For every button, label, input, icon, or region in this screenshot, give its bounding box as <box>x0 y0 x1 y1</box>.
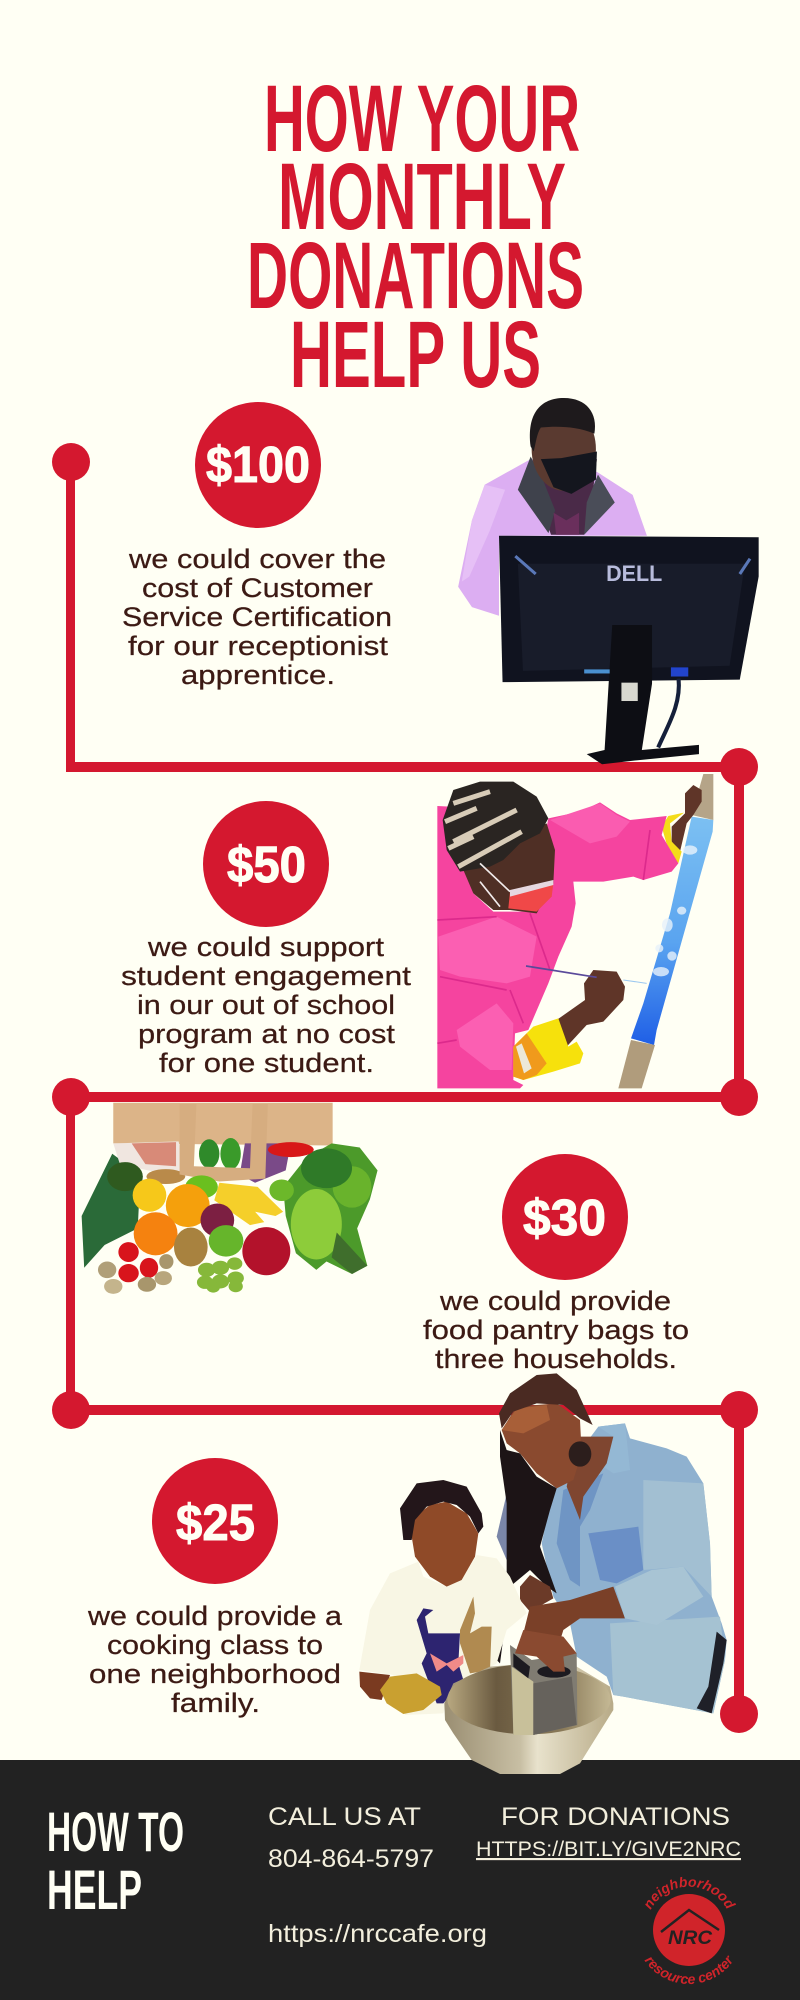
text: $50 description: student engagement <box>121 961 412 991</box>
footer panel <box>0 1760 800 2000</box>
text: $100 description: we could cover the <box>128 544 386 574</box>
amount badge: $50 <box>203 801 329 927</box>
text: $50 description: for one student. <box>159 1048 374 1078</box>
text: $25 description <box>87 1601 343 1718</box>
photo: grocery bag with produce <box>82 1103 378 1294</box>
contact: phone: CALL US AT <box>268 1803 421 1831</box>
contact: phone <box>268 1803 434 1873</box>
timeline connector <box>52 443 758 1733</box>
heading: how to help <box>47 1800 184 1921</box>
panel: $100 <box>122 398 759 764</box>
title: DONATIONS <box>247 223 584 329</box>
text: $50 description <box>121 932 412 1078</box>
text: $50 description: we could support <box>147 932 385 962</box>
logo: neighborhood resource center <box>644 1876 736 1984</box>
logo: neighborhood resource center: resource center <box>644 1955 732 1984</box>
text: $100 description: for our receptionist <box>128 631 389 661</box>
text: $100 description: cost of Customer <box>142 573 373 603</box>
photo: student painting a pole <box>437 774 713 1088</box>
amount badge: $100: $100 <box>206 436 310 493</box>
amount badge: $25 <box>152 1458 278 1584</box>
contact: donations link: FOR DONATIONS <box>501 1803 730 1831</box>
text: $30 description: three households. <box>435 1344 677 1374</box>
photo: receptionist at monitor: DELL <box>606 561 663 586</box>
text: $100 description: apprentice. <box>181 660 335 690</box>
contact: donations link <box>476 1803 741 1861</box>
text: $100 description <box>122 544 392 690</box>
text: $30 description <box>423 1286 689 1374</box>
text: $50 description: in our out of school <box>137 990 395 1020</box>
text: $100 description: Service Certification <box>122 602 392 632</box>
logo: neighborhood resource center: neighborhood <box>645 1876 736 1910</box>
text: $30 description: food pantry bags to <box>423 1315 689 1345</box>
text: $25 description: we could provide a <box>87 1601 343 1631</box>
amount badge: $25: $25 <box>176 1494 255 1551</box>
contact: phone: 804-864-5797 <box>268 1845 434 1873</box>
text: $25 description: family. <box>171 1688 260 1718</box>
heading: how to help: HELP <box>47 1858 142 1921</box>
text: $25 description: one neighborhood <box>89 1659 341 1689</box>
amount badge: $30: $30 <box>523 1189 606 1246</box>
text: $30 description: we could provide <box>439 1286 671 1316</box>
text: $25 description: cooking class to <box>107 1630 323 1660</box>
photo: woman and child cooking <box>359 1373 727 1774</box>
title: HOW YOUR <box>264 66 580 172</box>
amount badge: $30 <box>502 1154 628 1280</box>
logo: neighborhood resource center: NRC <box>668 1928 712 1949</box>
contact: donations link: HTTPS://BIT.LY/GIVE2NRC <box>476 1837 741 1861</box>
photo: receptionist at monitor <box>458 398 759 764</box>
panel: $50 <box>121 774 713 1088</box>
title <box>247 66 584 408</box>
amount badge: $50: $50 <box>227 836 306 893</box>
panel: $25 <box>87 1373 727 1774</box>
amount badge: $100 <box>195 402 321 528</box>
contact: website: https://nrccafe.org <box>268 1920 487 1948</box>
text: $50 description: program at no cost <box>138 1019 396 1049</box>
title: MONTHLY <box>278 144 566 250</box>
panel: $30 <box>82 1103 689 1374</box>
heading: how to help: HOW TO <box>47 1800 184 1863</box>
title: HELP US <box>290 302 541 408</box>
